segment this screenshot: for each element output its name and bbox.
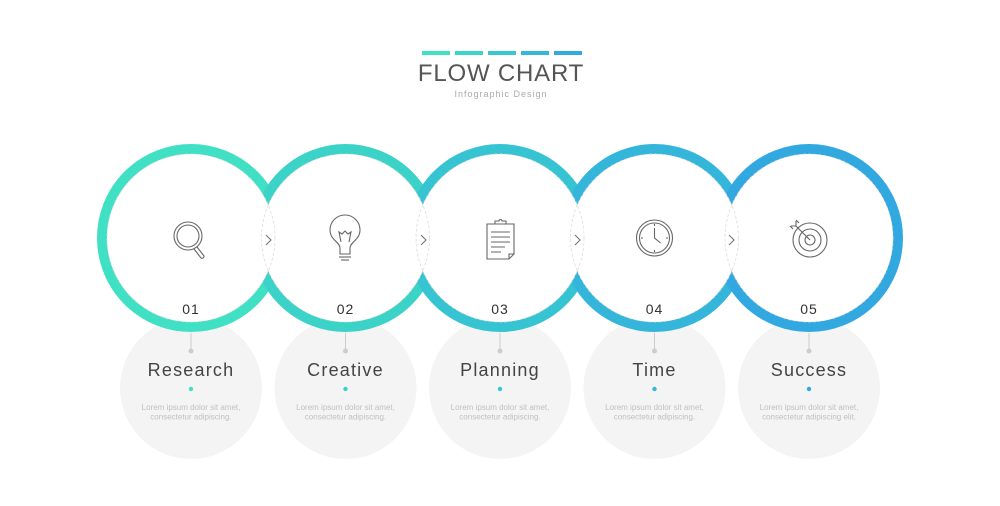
step labels: Research bbox=[148, 360, 234, 380]
numbers: 04 bbox=[646, 301, 663, 317]
ring interiors bbox=[107, 154, 893, 322]
descriptions: Lorem ipsum dolor sit amet, bbox=[296, 403, 395, 412]
step labels: Time bbox=[632, 360, 677, 380]
descriptions: consectetur adipiscing. bbox=[150, 412, 232, 422]
descriptions: Lorem ipsum dolor sit amet, bbox=[451, 403, 549, 412]
title bars bbox=[422, 51, 582, 55]
numbers bbox=[182, 301, 818, 317]
icon: magnifier bbox=[174, 222, 204, 258]
step labels: Success bbox=[771, 360, 847, 380]
grey text circles bbox=[120, 317, 880, 459]
numbers: 02 bbox=[337, 301, 354, 317]
descriptions: consectetur adipiscing elit. bbox=[762, 412, 856, 422]
numbers: 05 bbox=[800, 301, 818, 317]
descriptions: Lorem ipsum dolor sit amet, bbox=[142, 403, 240, 412]
step labels: Planning bbox=[460, 360, 540, 380]
descriptions: consectetur adipiscing. bbox=[459, 412, 541, 422]
colored dots bbox=[189, 387, 811, 391]
dashed outlines bbox=[107, 154, 893, 322]
descriptions: consectetur adipiscing. bbox=[614, 412, 695, 422]
rings bbox=[102, 149, 898, 327]
numbers: 01 bbox=[182, 301, 200, 317]
title: FLOW CHART bbox=[418, 60, 584, 87]
icon: clock bbox=[636, 220, 672, 256]
icon: target bbox=[790, 220, 827, 257]
numbers: 03 bbox=[491, 301, 509, 317]
descriptions: Lorem ipsum dolor sit amet, bbox=[605, 403, 704, 412]
descriptions: Lorem ipsum dolor sit amet, bbox=[760, 403, 858, 412]
step labels: Creative bbox=[307, 360, 384, 380]
subtitle: Infographic Design bbox=[454, 89, 548, 99]
step labels bbox=[148, 360, 847, 380]
icon: clipboard bbox=[487, 220, 514, 259]
descriptions: consectetur adipiscing. bbox=[305, 412, 386, 422]
connectors bbox=[191, 333, 809, 350]
arrows bbox=[266, 235, 734, 245]
icon: bulb bbox=[330, 215, 360, 260]
descriptions bbox=[142, 403, 858, 422]
